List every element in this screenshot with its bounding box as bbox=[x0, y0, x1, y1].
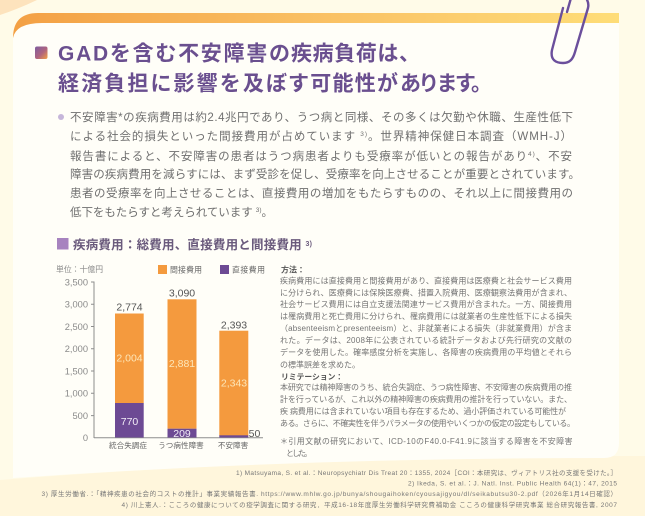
bar: schizophrenia: 統合失調症 bbox=[109, 440, 147, 450]
text block: methods: れた。データは、2008年に公表されている統計データおよび先行研究の文献の bbox=[280, 335, 572, 345]
bar: schizophrenia bbox=[109, 302, 147, 450]
bar: depression bbox=[158, 288, 204, 450]
title: あります。 bbox=[400, 72, 492, 96]
text block: intro paragraph: 患者の受療率を向上させることは、直接費用の増加をもたらすものの、それ以上に間接費用の bbox=[70, 186, 573, 200]
bar: depression: 3,090 bbox=[169, 288, 195, 300]
text block: methods: （absenteeismとpresenteeism）と、非就業者による損失（非就業費用）が含ま bbox=[280, 323, 572, 333]
title: す可能性が bbox=[288, 72, 398, 96]
axes bbox=[65, 277, 263, 443]
title bbox=[35, 42, 492, 96]
bar: depression: 2,881 bbox=[169, 358, 195, 370]
icon: paragraph bullet bbox=[58, 114, 64, 120]
title: 経済負担に影響を及ぼ bbox=[58, 72, 287, 96]
text block: intro paragraph: 3) bbox=[256, 207, 262, 214]
bar: schizophrenia: 770 bbox=[121, 416, 138, 428]
heading: chart section: 3) bbox=[306, 241, 312, 248]
text block: limitations: 本研究では精神障害のうち、統合失調症、うつ病性障害、不安障害の疾病費用の推 bbox=[280, 382, 572, 392]
text block: limitations: リミテーション： bbox=[281, 372, 343, 382]
text block: intro paragraph: による社会的損失といった間接費用が占めています bbox=[70, 131, 355, 143]
bar: schizophrenia: 2,774 bbox=[116, 302, 143, 314]
bar chart: cost by disorder bbox=[56, 264, 265, 450]
text block: intro paragraph: 3) bbox=[360, 131, 367, 138]
references: 1) Matsuyama, S. et al.：Neuropsychiatr Dis Treat 20：1355, 2024［COI：本研究は、ヴィアトリス社の支援を受けた。］ bbox=[236, 468, 617, 477]
text block: methods: 疾病費用には直接費用と間接費用があり、直接費用は医療費と社会サービス費用 bbox=[280, 276, 572, 286]
bar: anxiety bbox=[218, 320, 260, 450]
bar: anxiety: 不安障害 bbox=[218, 440, 249, 450]
text block: intro paragraph: 4) bbox=[528, 151, 535, 158]
text block: limitations bbox=[280, 372, 575, 428]
legend: 間接費用 bbox=[170, 264, 202, 274]
text block: intro paragraph bbox=[58, 110, 580, 219]
title: 疾病負荷は、 bbox=[291, 42, 420, 66]
text block: limitations: ある。さらに、不確実性を伴うパラメータの使用やいくつかの仮定の設定もしている。 bbox=[280, 418, 575, 428]
references: 3) 厚生労働省.：「精神疾患の社会的コストの推計」事業実績報告書. https://www.mhlw.go.jp/bunya/shougaihoken/cyousajigyou/dl/seikabutsu30-2.pdf（2026年1月14日確認） bbox=[42, 489, 617, 498]
text block: methods: の標準誤差を求めた。 bbox=[280, 360, 360, 370]
text block: methods: データを使用した。確率感度分析を実施し、各障害の疾病費用の平均値とそれら bbox=[280, 347, 572, 357]
references bbox=[42, 468, 617, 509]
heading: chart section: 疾病費用：総費用、直接費用と間接費用 bbox=[73, 238, 302, 252]
text block: limitations: 疾 病費用には含まれていない項目も存在するため、過小評価されている可能性が bbox=[280, 406, 566, 416]
text block: intro paragraph: 、不安 bbox=[536, 150, 572, 163]
axes: 2,000 bbox=[65, 344, 88, 354]
references: 2) Ikeda, S. et al.：J. Natl. Inst. Public Health 64(1)：47, 2015 bbox=[408, 480, 617, 487]
footnote: ICD definition bbox=[280, 436, 572, 458]
axes: 1,500 bbox=[65, 366, 88, 376]
axes: 2,500 bbox=[65, 322, 88, 332]
title: GADを含む不安障害の bbox=[58, 42, 290, 66]
unit label: 単位：十億円 bbox=[56, 264, 103, 274]
footnote: ICD definition: ＊引用文献の研究において、ICD-10のF40.0-F41.9に該当する障害を不安障害 bbox=[280, 436, 572, 446]
bar: anxiety: 50 bbox=[249, 428, 260, 440]
text block: intro paragraph: 。世界精神保健日本調査（WMH-J） bbox=[368, 129, 572, 143]
axes: 500 bbox=[72, 411, 88, 421]
axes: 0 bbox=[83, 433, 88, 443]
text block: limitations: 計を行っているが、これ以外の精神障害の疾病費用の推計を行っていない。また、 bbox=[280, 394, 572, 404]
bar: anxiety: 2,393 bbox=[221, 320, 247, 332]
text block: intro paragraph: 。 bbox=[262, 207, 273, 219]
references: 4) 川上憲人.：こころの健康についての疫学調査に関する研究．平成16-18年度厚生労働科学研究費補助金 こころの健康科学研究事業 総合研究報告書, 2007 bbox=[122, 500, 617, 509]
text block: methods: に分けられ、医療費には保険医療費、措置入院費用、医療観察法費用が含まれ、 bbox=[280, 288, 572, 298]
legend: 直接費用 bbox=[232, 264, 265, 274]
text block: methods: 社会サービス費用には自立支援法関連サービス費用が含まれた。一方、間接費用 bbox=[280, 299, 572, 309]
icon: paperclip bbox=[552, 0, 588, 63]
footnote: ICD definition: とした。 bbox=[286, 449, 312, 458]
bar: anxiety: 2,343 bbox=[221, 378, 247, 390]
axes: 3,500 bbox=[65, 277, 88, 287]
axes: 1,000 bbox=[65, 389, 88, 399]
text block: methods bbox=[280, 264, 572, 370]
text block: intro paragraph: 障害の疾病費用を減らすには、まず受診を促し、受療率を向上させることが重要とされています。 bbox=[70, 167, 580, 181]
text block: intro paragraph: 報告書によると、不安障害の患者はうつ病患者よりも受療率が低いとの報告があり bbox=[70, 151, 527, 163]
legend bbox=[158, 264, 265, 274]
axes: 3,000 bbox=[65, 300, 88, 310]
text block: methods: 方法： bbox=[281, 264, 305, 274]
bar: schizophrenia: 2,004 bbox=[116, 353, 143, 365]
bar: depression: 209 bbox=[173, 428, 191, 440]
icon: title square bullet bbox=[35, 46, 48, 59]
text block: methods: は罹病費用と死亡費用に分けられ、罹病費用には就業者の生産性低下による損失 bbox=[280, 311, 572, 321]
bar: depression: うつ病性障害 bbox=[158, 440, 204, 450]
text block: intro paragraph: 低下をもたらすと考えられています bbox=[70, 207, 253, 219]
text block: intro paragraph: 不安障害*の疾病費用は約2.4兆円であり、うつ病と同様、その多くは欠勤や休職、生産性低下 bbox=[70, 110, 573, 124]
